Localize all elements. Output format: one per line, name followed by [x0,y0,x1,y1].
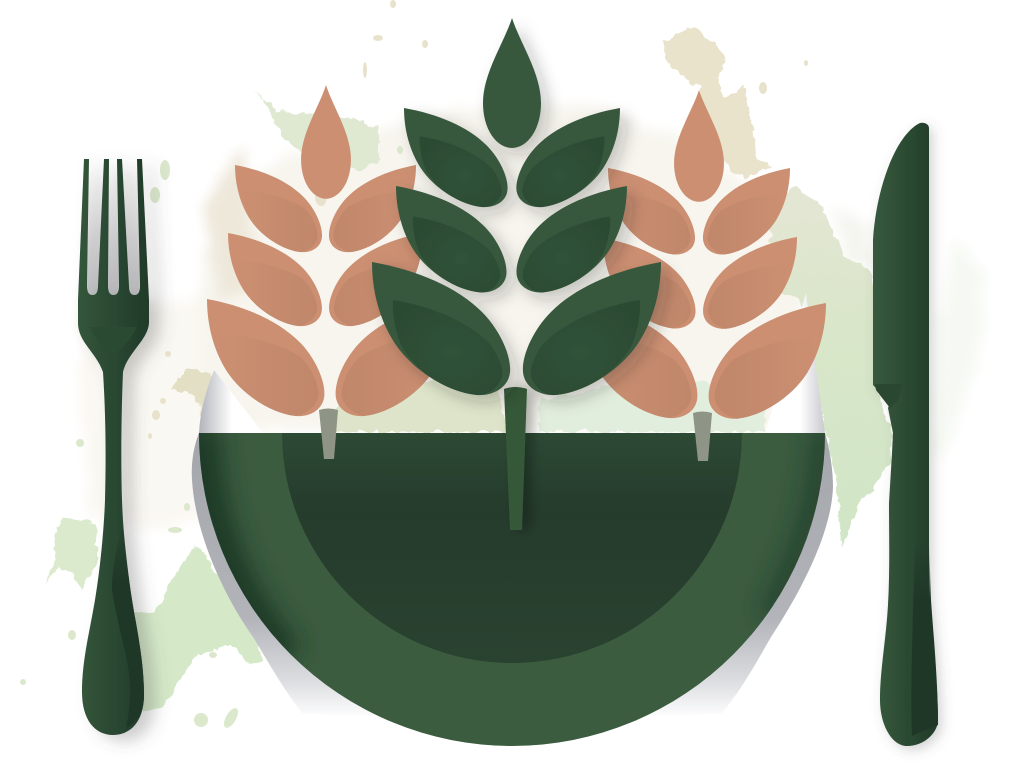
grain: left top [301,85,351,199]
grain row 3 left [207,299,324,416]
plate rim: left [192,370,380,716]
grain row 3 left [372,262,510,395]
plate rim: right [640,293,833,716]
grain: right top [674,90,724,202]
icon: fork [78,159,149,735]
stem left [319,408,338,459]
fork neck triangle [90,327,137,354]
grain row 2 right [329,233,423,326]
wheat stalk: center green [372,18,661,530]
plate [199,425,825,746]
grain row 2 left [396,186,507,292]
grain row 3 right [709,303,826,419]
grain row 2 left [603,238,696,329]
wheat stalk: left salmon [207,85,453,459]
grain row 3 right [336,299,453,416]
grain row 3 right [523,262,661,395]
paint specks [20,146,403,730]
grain row 1 right [516,108,620,207]
grain row 2 right [516,186,627,292]
grain row 2 right [703,237,797,329]
knife handle shading [911,540,938,736]
grain row 1 left [235,165,322,252]
plate edge shading [199,425,825,660]
icon: knife [873,123,938,746]
center stem [504,387,527,530]
wheat stalk: right salmon [580,90,826,461]
plate inner bowl [282,433,742,663]
stem right [693,412,712,461]
grain: center top [483,18,541,148]
grain row 1 left [608,168,695,255]
knife bolster shading [875,384,902,408]
grain row 1 left [404,108,508,207]
grain row 1 right [329,165,416,252]
grain row 2 left [228,233,322,326]
grain row 1 right [703,168,790,255]
center grains [372,18,661,395]
fork handle shading [112,520,144,728]
grain row 3 left [580,301,697,418]
